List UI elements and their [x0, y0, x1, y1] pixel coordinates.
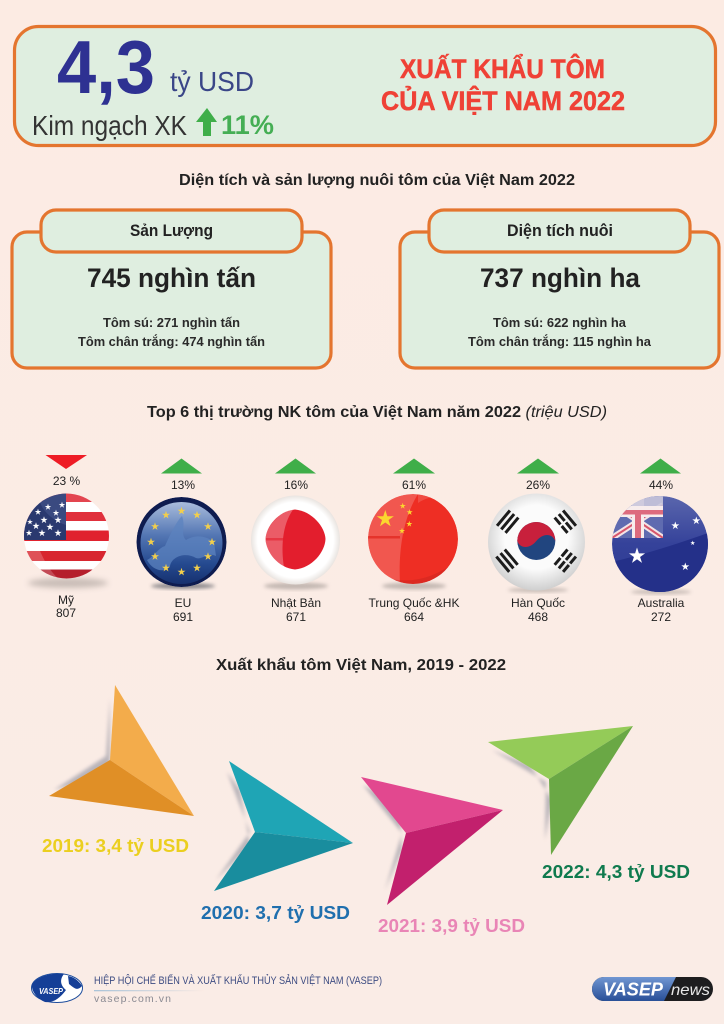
- flag: Japan: [251, 496, 340, 584]
- icon: up triangle: [640, 458, 681, 474]
- card body: [12, 232, 331, 368]
- tab label: Diện tích nuôi: [507, 222, 613, 240]
- sphere shadow: [264, 582, 328, 590]
- market: Mỹ: [24, 455, 110, 620]
- tab: [429, 210, 690, 252]
- heading: area and output: Diện tích và sản lượng nuôi tôm của Việt Nam 2022: [179, 172, 575, 189]
- sphere shadow: [508, 588, 568, 592]
- detail: tôm sú: Tôm sú: 622 nghìn ha: [493, 315, 627, 330]
- market: Trung Quốc & HK: [368, 458, 459, 624]
- flag: Australia: [610, 495, 708, 595]
- label: 2020: 2020: 3,7 tỷ USD: [201, 903, 350, 923]
- name: Nhật Bản: [271, 596, 321, 610]
- name: Trung Quốc &HK: [369, 596, 459, 610]
- big number 4,3: 4,3: [57, 25, 155, 109]
- heading: top 6 markets: Top 6 thị trường NK tôm của Việt Nam năm 2022 (triệu USD): [147, 404, 607, 421]
- change: 26%: [526, 478, 550, 492]
- card body: [400, 232, 719, 368]
- value: 664: [404, 610, 424, 624]
- logo: VASEP news: news: [671, 982, 710, 999]
- value: 691: [173, 610, 193, 624]
- arrow: 2022: [488, 726, 633, 855]
- main value: 737 nghìn ha: [480, 263, 641, 293]
- label: Kim ngạch XK: Kim ngạch XK: [32, 110, 187, 141]
- arrow: 2020: [214, 761, 353, 891]
- market: Hàn Quốc: [488, 458, 585, 624]
- panel background: [14, 26, 716, 146]
- value: 671: [286, 610, 306, 624]
- icon: up triangle: [393, 458, 435, 474]
- label: 2021: 2021: 3,9 tỷ USD: [378, 916, 525, 936]
- flag: China: [368, 494, 458, 590]
- logo: VASEP news: VASEP: [603, 980, 664, 1000]
- change: 44%: [649, 478, 673, 492]
- title: CỦA VIỆT NAM 2022: [381, 84, 625, 116]
- change: 13%: [171, 478, 195, 492]
- value: 272: [651, 610, 671, 624]
- value: 468: [528, 610, 548, 624]
- sphere shadow: [151, 583, 215, 589]
- footer organisation name: HIỆP HỘI CHẾ BIẾN VÀ XUẤT KHẨU THỦY SẢN VIỆT NAM (VASEP): [94, 974, 382, 987]
- icon: up triangle: [517, 458, 559, 474]
- flag: USA: [24, 493, 110, 581]
- detail: tôm sú: Tôm sú: 271 nghìn tấn: [103, 315, 240, 330]
- flag: EU: [136, 497, 226, 587]
- logo: VASEP globe: [32, 974, 82, 1002]
- tab label: Sản Lượng: [130, 222, 213, 240]
- flag: South Korea: [488, 494, 585, 590]
- arrow: 2019: [49, 685, 194, 816]
- label: 2022: 2022: 4,3 tỷ USD: [542, 862, 690, 882]
- name: Hàn Quốc: [511, 596, 565, 610]
- label: 2019: 2019: 3,4 tỷ USD: [42, 836, 189, 856]
- arrow: 2021: [361, 777, 503, 905]
- unit: tỷ USD: tỷ USD: [170, 66, 254, 97]
- main value: 745 nghìn tấn: [87, 263, 256, 293]
- icon: down triangle: [46, 455, 87, 469]
- logo: VASEP news: [592, 977, 713, 1001]
- change: 61%: [402, 478, 426, 492]
- panel: Sản Lượng: [12, 210, 331, 368]
- value: 807: [56, 606, 76, 620]
- name: Mỹ: [58, 593, 74, 607]
- detail: tôm chân trắng: Tôm chân trắng: 474 nghìn tấn: [78, 334, 265, 349]
- icon: up triangle: [161, 458, 202, 474]
- change: 23 %: [53, 474, 81, 488]
- tab: [41, 210, 302, 252]
- sphere shadow: [382, 582, 446, 590]
- icon: up triangle: [275, 458, 316, 474]
- growth 11%: 11%: [221, 110, 274, 140]
- logo: VASEP globe: VASEP: [39, 986, 63, 996]
- detail: tôm chân trắng: Tôm chân trắng: 115 nghìn ha: [468, 334, 652, 349]
- sphere shadow: [28, 578, 108, 588]
- heading: exports 2019-2022: Xuất khẩu tôm Việt Nam, 2019 - 2022: [216, 656, 506, 674]
- market: Australia: [610, 458, 708, 624]
- name: Australia: [638, 596, 685, 610]
- title: [381, 53, 625, 116]
- market: Nhật Bản: [251, 458, 340, 624]
- footer website: vasep.com.vn: [94, 993, 171, 1005]
- name: EU: [175, 596, 191, 610]
- change: 16%: [284, 478, 308, 492]
- title: XUẤT KHẨU TÔM: [400, 53, 605, 84]
- panel: headline export value: [14, 25, 716, 146]
- sphere shadow: [631, 590, 691, 594]
- panel: Diện tích nuôi: [400, 210, 719, 368]
- market: EU: [136, 458, 226, 624]
- icon: up arrow: [196, 108, 217, 136]
